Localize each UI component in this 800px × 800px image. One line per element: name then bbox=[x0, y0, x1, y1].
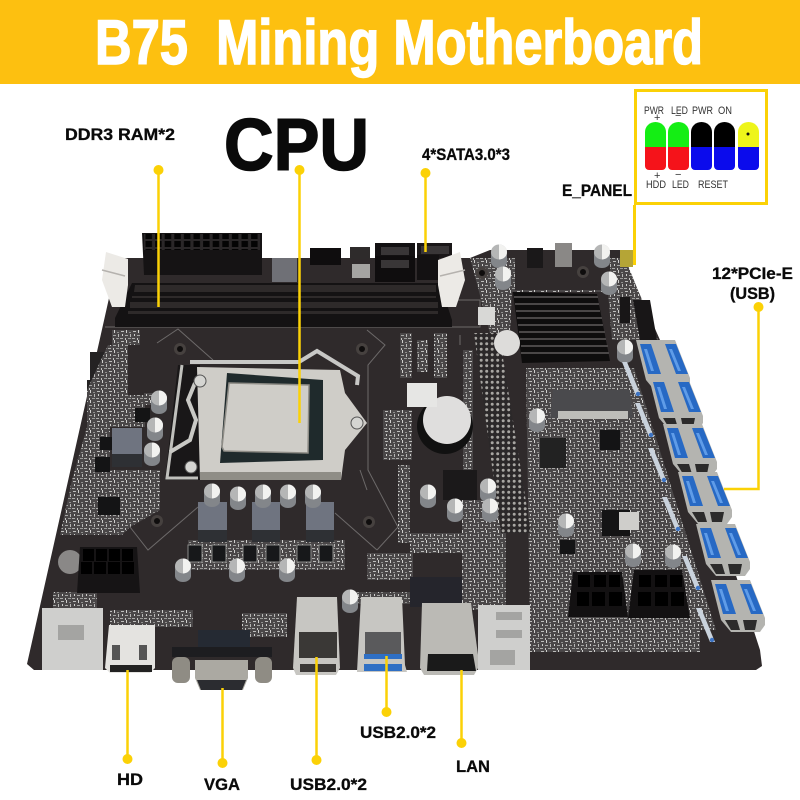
pointer: DDR3 RAM bbox=[154, 165, 164, 307]
label: DDR3 RAM: DDR3 RAM*2 bbox=[65, 126, 175, 144]
label: PCIe USB: 12*PCIe-E bbox=[712, 265, 793, 283]
pin header top labels: − bbox=[675, 110, 681, 122]
12 USB PCIe-E ports bbox=[636, 340, 765, 632]
RAM slot clips bbox=[102, 252, 465, 307]
pin header bottom labels: HDD bbox=[646, 179, 666, 191]
CPU heat spreader bbox=[222, 383, 309, 453]
pin header bottom labels: + bbox=[654, 170, 660, 182]
board PCB bbox=[27, 250, 762, 670]
HDMI port bbox=[105, 625, 155, 673]
pointer: LAN bbox=[456, 670, 466, 748]
PCIe 6-pin connectors bbox=[568, 570, 690, 618]
pointer: VGA bbox=[218, 688, 228, 768]
CPU power connector bbox=[58, 547, 140, 593]
USB 2.0 stacked port bbox=[293, 597, 340, 675]
white sticker pad bbox=[407, 383, 437, 407]
pin header top labels: + bbox=[654, 112, 660, 124]
pin header field bbox=[474, 333, 531, 533]
pin header top labels bbox=[644, 105, 732, 124]
pin header bottom labels: RESET bbox=[698, 179, 728, 191]
pin column PWR LED plus bbox=[645, 122, 666, 170]
pin header top labels: PWR bbox=[644, 105, 664, 117]
label: PCIe USB: (USB) bbox=[730, 285, 775, 303]
MOSFETs bbox=[188, 545, 333, 562]
components above heatsink bbox=[476, 243, 589, 279]
label: USB2.0 left: USB2.0*2 bbox=[290, 776, 367, 794]
label: VGA: VGA bbox=[204, 776, 240, 794]
frame lower shadow bbox=[200, 472, 341, 480]
pointer: HD bbox=[122, 670, 132, 764]
CPU socket metal frame bbox=[197, 367, 367, 480]
SATA connectors bbox=[375, 243, 452, 282]
socket opening bbox=[220, 373, 323, 463]
component speckle areas bbox=[53, 258, 716, 652]
round white sticker bbox=[494, 330, 520, 356]
black headers near battery bbox=[443, 470, 477, 500]
pin column power on bbox=[714, 122, 735, 170]
motherboard photo bbox=[27, 233, 765, 690]
ATX power connector bbox=[142, 233, 262, 275]
label: LAN: LAN bbox=[456, 758, 490, 776]
pin header top labels: PWR bbox=[692, 105, 713, 117]
silver ground pads bbox=[42, 605, 530, 670]
VGA port bbox=[172, 630, 272, 690]
capacitors bbox=[144, 244, 681, 613]
left rear headers bbox=[87, 352, 110, 407]
DIMM RAM slots bbox=[115, 283, 452, 327]
pin header bottom labels: − bbox=[675, 169, 681, 181]
pointer: SATA bbox=[420, 168, 430, 252]
VRM chokes bbox=[112, 428, 334, 542]
mSATA slot bbox=[550, 390, 633, 419]
label: E_PANEL: E_PANEL bbox=[562, 182, 632, 200]
pin header bottom labels: LED bbox=[672, 179, 689, 191]
small sticker chip bbox=[619, 512, 639, 530]
pointer: USB2.0 center bbox=[382, 656, 392, 717]
pin column power switch bbox=[691, 122, 712, 170]
pointer: USB2.0 left bbox=[312, 657, 322, 765]
pointer: PCIe USB bbox=[724, 302, 764, 489]
CPU socket left retention bbox=[165, 365, 200, 480]
USB 3.0 stacked port bbox=[357, 597, 407, 672]
pin header bottom labels bbox=[646, 169, 728, 191]
LAN port bbox=[420, 603, 478, 675]
pin column key bbox=[738, 122, 759, 170]
pin header top labels: LED bbox=[671, 105, 688, 117]
label: PCIe USB bbox=[712, 265, 793, 303]
fan header and chip bbox=[272, 247, 370, 282]
panel: E_PANEL pin diagram bbox=[636, 90, 766, 204]
CPU socket lever bbox=[190, 351, 358, 385]
mounting holes bbox=[151, 343, 375, 528]
label: CPU: CPU bbox=[224, 105, 369, 186]
socket screws bbox=[185, 375, 363, 473]
dark chips bbox=[95, 395, 630, 607]
label: SATA: 4*SATA3.0*3 bbox=[422, 146, 510, 164]
pointer: E_PANEL bbox=[633, 205, 636, 265]
coin battery bbox=[417, 396, 473, 454]
slanted PCIe slots bbox=[622, 362, 715, 642]
white square label bbox=[478, 307, 495, 325]
label: USB2.0 center: USB2.0*2 bbox=[360, 724, 436, 742]
label: HD: HD bbox=[117, 771, 143, 789]
front panel pin headers bbox=[620, 250, 657, 340]
pin header top labels: ON bbox=[718, 105, 732, 117]
heatsink bbox=[513, 292, 610, 363]
pin column PWR LED minus bbox=[668, 122, 689, 170]
pointer: CPU bbox=[294, 165, 304, 423]
PCB trace lines bbox=[105, 300, 480, 550]
